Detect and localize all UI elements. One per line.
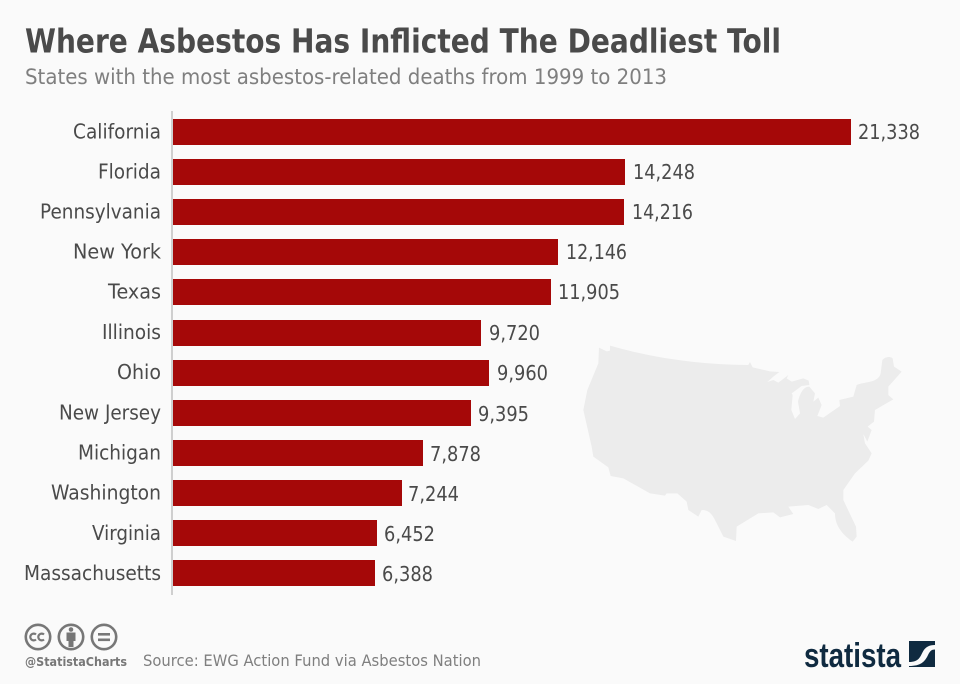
- row: Illinois: [102, 320, 540, 346]
- row: Massachusetts: 6,388: [382, 562, 433, 586]
- row: Virginia: Virginia: [92, 521, 161, 545]
- row: Massachusetts: Massachusetts: [24, 561, 161, 585]
- row: Pennsylvania: [40, 199, 693, 225]
- row: New York: New York: [73, 240, 161, 264]
- row: New Jersey: [59, 400, 529, 426]
- logo: statista wordmark: statista: [804, 637, 902, 675]
- row: Texas: [107, 279, 620, 305]
- row: Virginia: [92, 520, 435, 546]
- row: New York: [73, 239, 627, 265]
- icon: attribution: [59, 625, 83, 649]
- row: Florida: [98, 159, 695, 185]
- row: Florida: Florida: [98, 160, 161, 184]
- row: Pennsylvania: 14,216: [632, 200, 693, 224]
- row: Michigan: 7,878: [430, 442, 481, 466]
- vertical axis line: [171, 111, 173, 595]
- row: Michigan: [78, 440, 481, 466]
- row: California: California: [73, 120, 161, 144]
- row: Texas: Texas: [107, 280, 161, 304]
- row: New Jersey: 9,395: [478, 402, 529, 426]
- row: Illinois: Illinois: [102, 320, 161, 344]
- map: United States silhouette: [583, 346, 902, 542]
- icon: creative commons: [26, 625, 50, 649]
- logo: statista mark: [909, 641, 935, 667]
- bar chart: [24, 119, 920, 586]
- row: Massachusetts: [24, 560, 433, 586]
- handle: @StatistaCharts: [25, 654, 127, 669]
- row: Washington: Washington: [51, 480, 161, 504]
- row: Ohio: [117, 360, 548, 386]
- row: Washington: [51, 480, 459, 506]
- row: Ohio: Ohio: [117, 360, 161, 384]
- row: Florida: 14,248: [633, 160, 695, 184]
- row: Illinois: 9,720: [489, 321, 540, 345]
- row: Washington: 7,244: [408, 482, 459, 506]
- row: California: 21,338: [858, 120, 920, 144]
- row: Ohio: 9,960: [497, 361, 548, 385]
- icon: no derivatives: [92, 625, 116, 649]
- row: New York: 12,146: [566, 240, 627, 264]
- row: California: [73, 119, 920, 145]
- row: Michigan: Michigan: [78, 440, 161, 464]
- row: Virginia: 6,452: [384, 522, 435, 546]
- row: New Jersey: New Jersey: [59, 400, 161, 424]
- source: Source: EWG Action Fund via Asbestos Nation: [143, 651, 481, 670]
- subtitle: States with the most asbestos-related deaths from 1999 to 2013: [25, 65, 667, 90]
- row: Texas: 11,905: [558, 280, 620, 304]
- row: Pennsylvania: Pennsylvania: [40, 200, 161, 224]
- title: Where Asbestos Has Inflicted The Deadliest Toll: [25, 22, 781, 60]
